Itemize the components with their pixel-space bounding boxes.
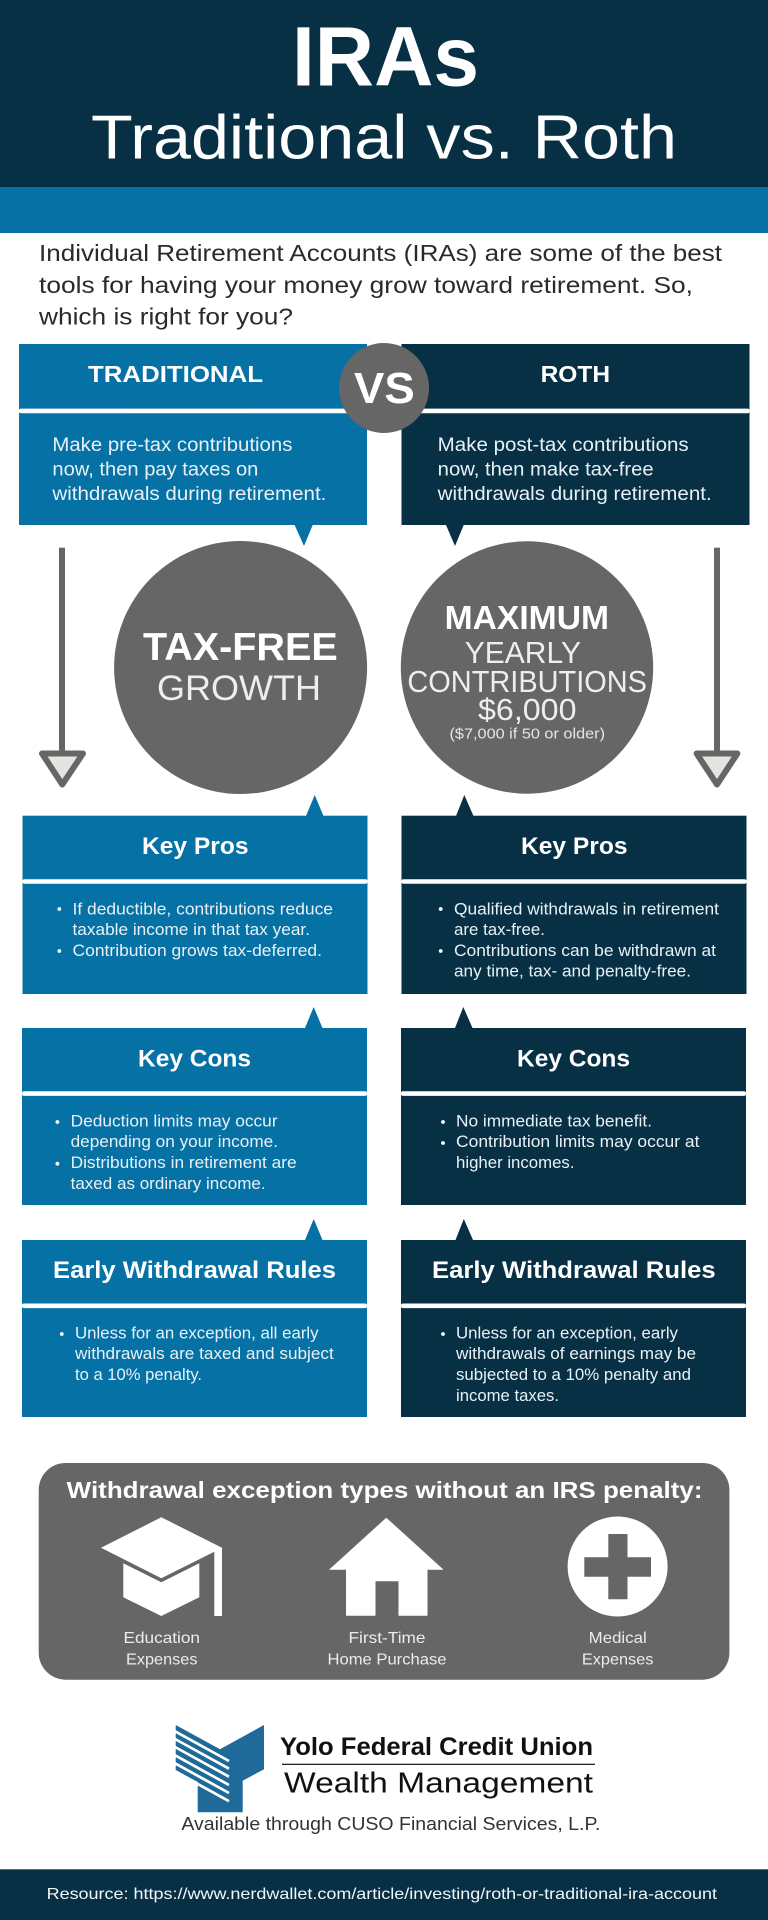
label: education expenses: Education [124, 1630, 200, 1647]
text: traditional summary: withdrawals during retirement. [51, 484, 326, 505]
badge: VS: VS [354, 364, 415, 413]
list: traditional cons [56, 1113, 297, 1193]
subtitle: Traditional vs. Roth [91, 104, 677, 173]
list: roth pros [439, 900, 719, 981]
list: traditional pros: taxable income in that tax year. [72, 921, 310, 939]
circle: maximum yearly contributions: MAXIMUM [445, 599, 609, 636]
list: traditional rules: Unless for an exception, all early [75, 1325, 319, 1343]
text: traditional summary: Make pre-tax contributions [52, 435, 292, 456]
list: roth cons: Contribution limits may occur at [456, 1133, 700, 1151]
circle: tax-free growth: TAX-FREE [143, 626, 338, 669]
panel: traditional early withdrawal rules [22, 1219, 367, 1417]
text: company name: Yolo Federal Credit Union [280, 1733, 593, 1761]
list: roth rules [441, 1325, 696, 1405]
arrow: right down [697, 548, 737, 784]
list: roth rules: income taxes. [456, 1387, 559, 1405]
text: wealth management: Wealth Management [284, 1768, 593, 1800]
list: traditional cons: taxed as ordinary income. [71, 1175, 266, 1193]
logo: Yolo Federal Credit Union [175, 1725, 600, 1834]
list: traditional cons: Deduction limits may occur [71, 1113, 278, 1131]
list: roth pros: any time, tax- and penalty-free. [454, 963, 691, 981]
heading: roth: ROTH [541, 361, 610, 387]
list: roth rules: subjected to a 10% penalty and [456, 1366, 691, 1384]
circle: tax-free growth: GROWTH [157, 669, 321, 708]
list: roth cons [441, 1113, 700, 1172]
list: traditional rules: withdrawals are taxed and subject [74, 1345, 334, 1363]
circle: maximum yearly contributions: $6,000 [478, 692, 576, 727]
circle: maximum yearly contributions: CONTRIBUTIONS [407, 664, 647, 699]
label: medical expenses [582, 1630, 653, 1669]
text: roth summary [437, 435, 712, 505]
list: traditional cons: Distributions in retirement are [71, 1154, 297, 1172]
panel: roth summary [402, 344, 750, 546]
text: roth summary: Make post-tax contributions [438, 435, 689, 456]
panel: traditional key pros [22, 795, 368, 994]
list: traditional rules [60, 1325, 334, 1384]
label: first-time home purchase: First-Time [348, 1630, 426, 1647]
list: roth cons: higher incomes. [456, 1154, 574, 1172]
text: roth summary: withdrawals during retirement. [437, 484, 712, 505]
panel: traditional key cons [22, 1007, 367, 1205]
text: availability note: Available through CUSO Financial Services, L.P. [181, 1814, 600, 1834]
heading: traditional: TRADITIONAL [88, 361, 263, 387]
circle: maximum yearly contributions: YEARLY [465, 635, 581, 670]
list: roth pros: Contributions can be withdrawn at [454, 942, 716, 960]
label: education expenses: Expenses [126, 1652, 198, 1669]
panel: roth early withdrawal rules [401, 1219, 746, 1417]
heading: key pros: Key Pros [142, 833, 248, 860]
label: first-time home purchase [328, 1630, 447, 1669]
panel: roth key cons [401, 1007, 746, 1205]
text: traditional summary: now, then pay taxes on [52, 460, 258, 480]
heading: withdrawal exceptions: Withdrawal exception types without an IRS penalty: [67, 1477, 702, 1503]
circle: maximum yearly contributions [401, 541, 653, 794]
heading: early withdrawal rules: Early Withdrawal Rules [432, 1257, 716, 1284]
header banner [0, 0, 768, 233]
badge: VS [339, 343, 429, 433]
list: roth cons: No immediate tax benefit. [456, 1113, 652, 1131]
footer: resource link [0, 1869, 768, 1920]
circle: maximum yearly contributions: ($7,000 if 50 or older) [450, 727, 605, 743]
panel: withdrawal exceptions [39, 1463, 729, 1680]
label: medical expenses: Medical [589, 1630, 647, 1647]
icon: graduation cap [101, 1517, 222, 1616]
list: roth pros: are tax-free. [454, 921, 545, 939]
icon: house [329, 1518, 444, 1616]
arrow: left down [42, 548, 83, 784]
title: IRAs [292, 10, 479, 104]
list: traditional pros [57, 900, 333, 960]
panel: traditional summary [19, 344, 367, 546]
list: traditional pros: Contribution grows tax-deferred. [72, 942, 322, 960]
list: roth rules: withdrawals of earnings may be [455, 1345, 696, 1363]
heading: key cons: Key Cons [138, 1046, 251, 1073]
list: roth pros: Qualified withdrawals in retirement [454, 900, 719, 918]
circle: tax-free growth [114, 541, 367, 794]
label: education expenses [124, 1630, 200, 1669]
footer: resource link: Resource: https://www.nerdwallet.com/article/investing/roth-or-traditional-ira-account [47, 1886, 718, 1903]
panel: roth key pros [402, 795, 746, 994]
label: first-time home purchase: Home Purchase [328, 1652, 447, 1669]
list: roth rules: Unless for an exception, early [456, 1325, 679, 1343]
label: medical expenses: Expenses [582, 1652, 653, 1669]
list: traditional pros: If deductible, contributions reduce [72, 900, 333, 918]
heading: early withdrawal rules: Early Withdrawal Rules [53, 1257, 336, 1284]
text: roth summary: now, then make tax-free [438, 460, 654, 480]
icon: logo mark [175, 1725, 264, 1812]
heading: key pros: Key Pros [521, 833, 628, 860]
icon: medical cross [568, 1516, 668, 1616]
intro text: which is right for you? [38, 304, 293, 330]
intro text: tools for having your money grow toward retirement. So, [39, 272, 693, 298]
list: traditional rules: to a 10% penalty. [75, 1366, 202, 1384]
list: traditional cons: depending on your income. [71, 1133, 278, 1151]
intro text [38, 240, 723, 330]
text: traditional summary [51, 435, 326, 505]
heading: key cons: Key Cons [517, 1046, 630, 1073]
intro text: Individual Retirement Accounts (IRAs) are some of the best [39, 240, 723, 266]
